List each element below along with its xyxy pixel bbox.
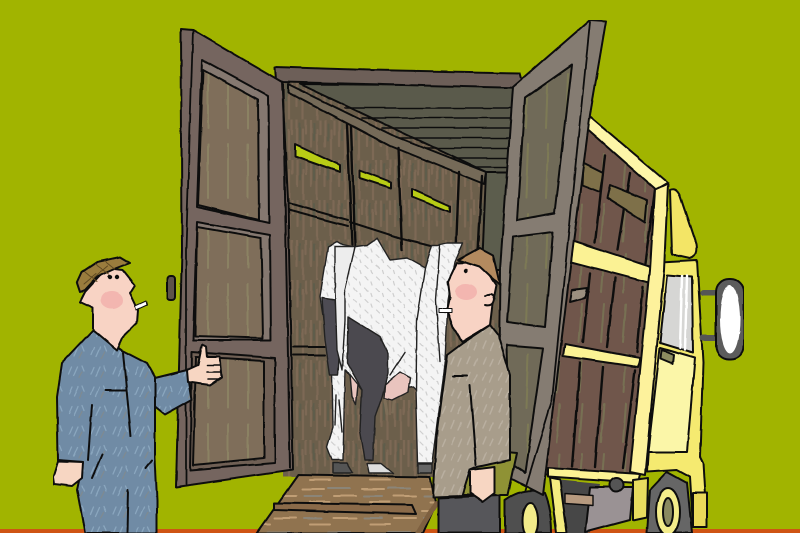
wall uprights — [347, 124, 482, 270]
upper door panel — [197, 60, 269, 223]
ceiling — [300, 84, 520, 180]
hand — [470, 467, 495, 502]
chassis shadow — [560, 480, 600, 533]
ear — [485, 294, 494, 305]
door handle — [167, 276, 175, 300]
wall rails — [288, 203, 450, 355]
rear end wall — [482, 172, 518, 270]
flat cap — [77, 257, 130, 292]
cab body — [647, 260, 707, 527]
cap check lines — [84, 261, 115, 284]
lower cross bar — [548, 468, 640, 483]
side vent 3 — [570, 288, 587, 302]
ramp — [257, 475, 436, 533]
vent slot 2 — [360, 170, 391, 188]
man with thumb up — [53, 257, 222, 533]
tank cap — [610, 478, 624, 492]
hat — [458, 248, 500, 285]
lower right door panel — [507, 345, 543, 473]
cigarette — [439, 308, 452, 312]
lower door panel — [190, 352, 275, 470]
side vent 2 — [607, 185, 647, 222]
far rear leg dark patch — [322, 298, 340, 375]
cigarette — [135, 301, 147, 310]
cow dark patch — [347, 317, 388, 460]
yellow support — [550, 478, 567, 533]
top frame — [275, 67, 524, 88]
door handle plate — [661, 350, 674, 364]
left hand — [53, 461, 83, 486]
tank strap — [565, 493, 593, 505]
trousers — [438, 495, 500, 533]
yellow step — [633, 478, 648, 520]
eye — [465, 270, 467, 272]
cow white silhouette — [320, 238, 463, 463]
middle cross bar — [563, 344, 640, 367]
cab spoiler — [670, 189, 696, 258]
fuel tank — [585, 487, 633, 532]
rear wheel — [505, 491, 552, 533]
hooves — [333, 463, 353, 473]
cow — [320, 238, 463, 473]
upper cross bar — [571, 241, 652, 283]
middle door panel — [193, 222, 271, 340]
side vent 1 — [582, 163, 603, 192]
leg strip — [335, 247, 355, 370]
front leg outline — [416, 245, 440, 390]
tail — [335, 352, 405, 432]
thumbs up hand — [187, 345, 222, 385]
ground stripe — [0, 529, 800, 533]
cab window — [660, 275, 693, 353]
ramp rail — [274, 503, 416, 514]
mirror — [703, 293, 718, 338]
front pole — [630, 184, 668, 475]
finger lines — [207, 365, 221, 379]
upper right door panel — [517, 65, 572, 220]
head and neck — [80, 268, 138, 350]
arm raised — [155, 370, 192, 415]
front wheel — [647, 472, 692, 533]
top yellow rail — [588, 116, 668, 190]
vent slot 1 — [295, 144, 340, 172]
head and neck — [447, 262, 496, 342]
folder — [460, 448, 517, 495]
cab door — [648, 348, 695, 452]
diagonal roof beam — [288, 84, 486, 184]
right door — [498, 20, 606, 495]
truck side and cab — [505, 116, 744, 533]
truck side wood panels — [545, 122, 658, 475]
overalls body — [57, 330, 157, 533]
coat — [433, 325, 510, 497]
man with clipboard — [433, 248, 517, 533]
udder — [384, 372, 410, 400]
vent slot 3 — [412, 189, 450, 212]
rear wall — [283, 82, 518, 477]
middle right door panel — [507, 232, 553, 327]
truck interior — [275, 67, 524, 477]
bumper — [693, 493, 707, 527]
left door — [167, 29, 293, 487]
